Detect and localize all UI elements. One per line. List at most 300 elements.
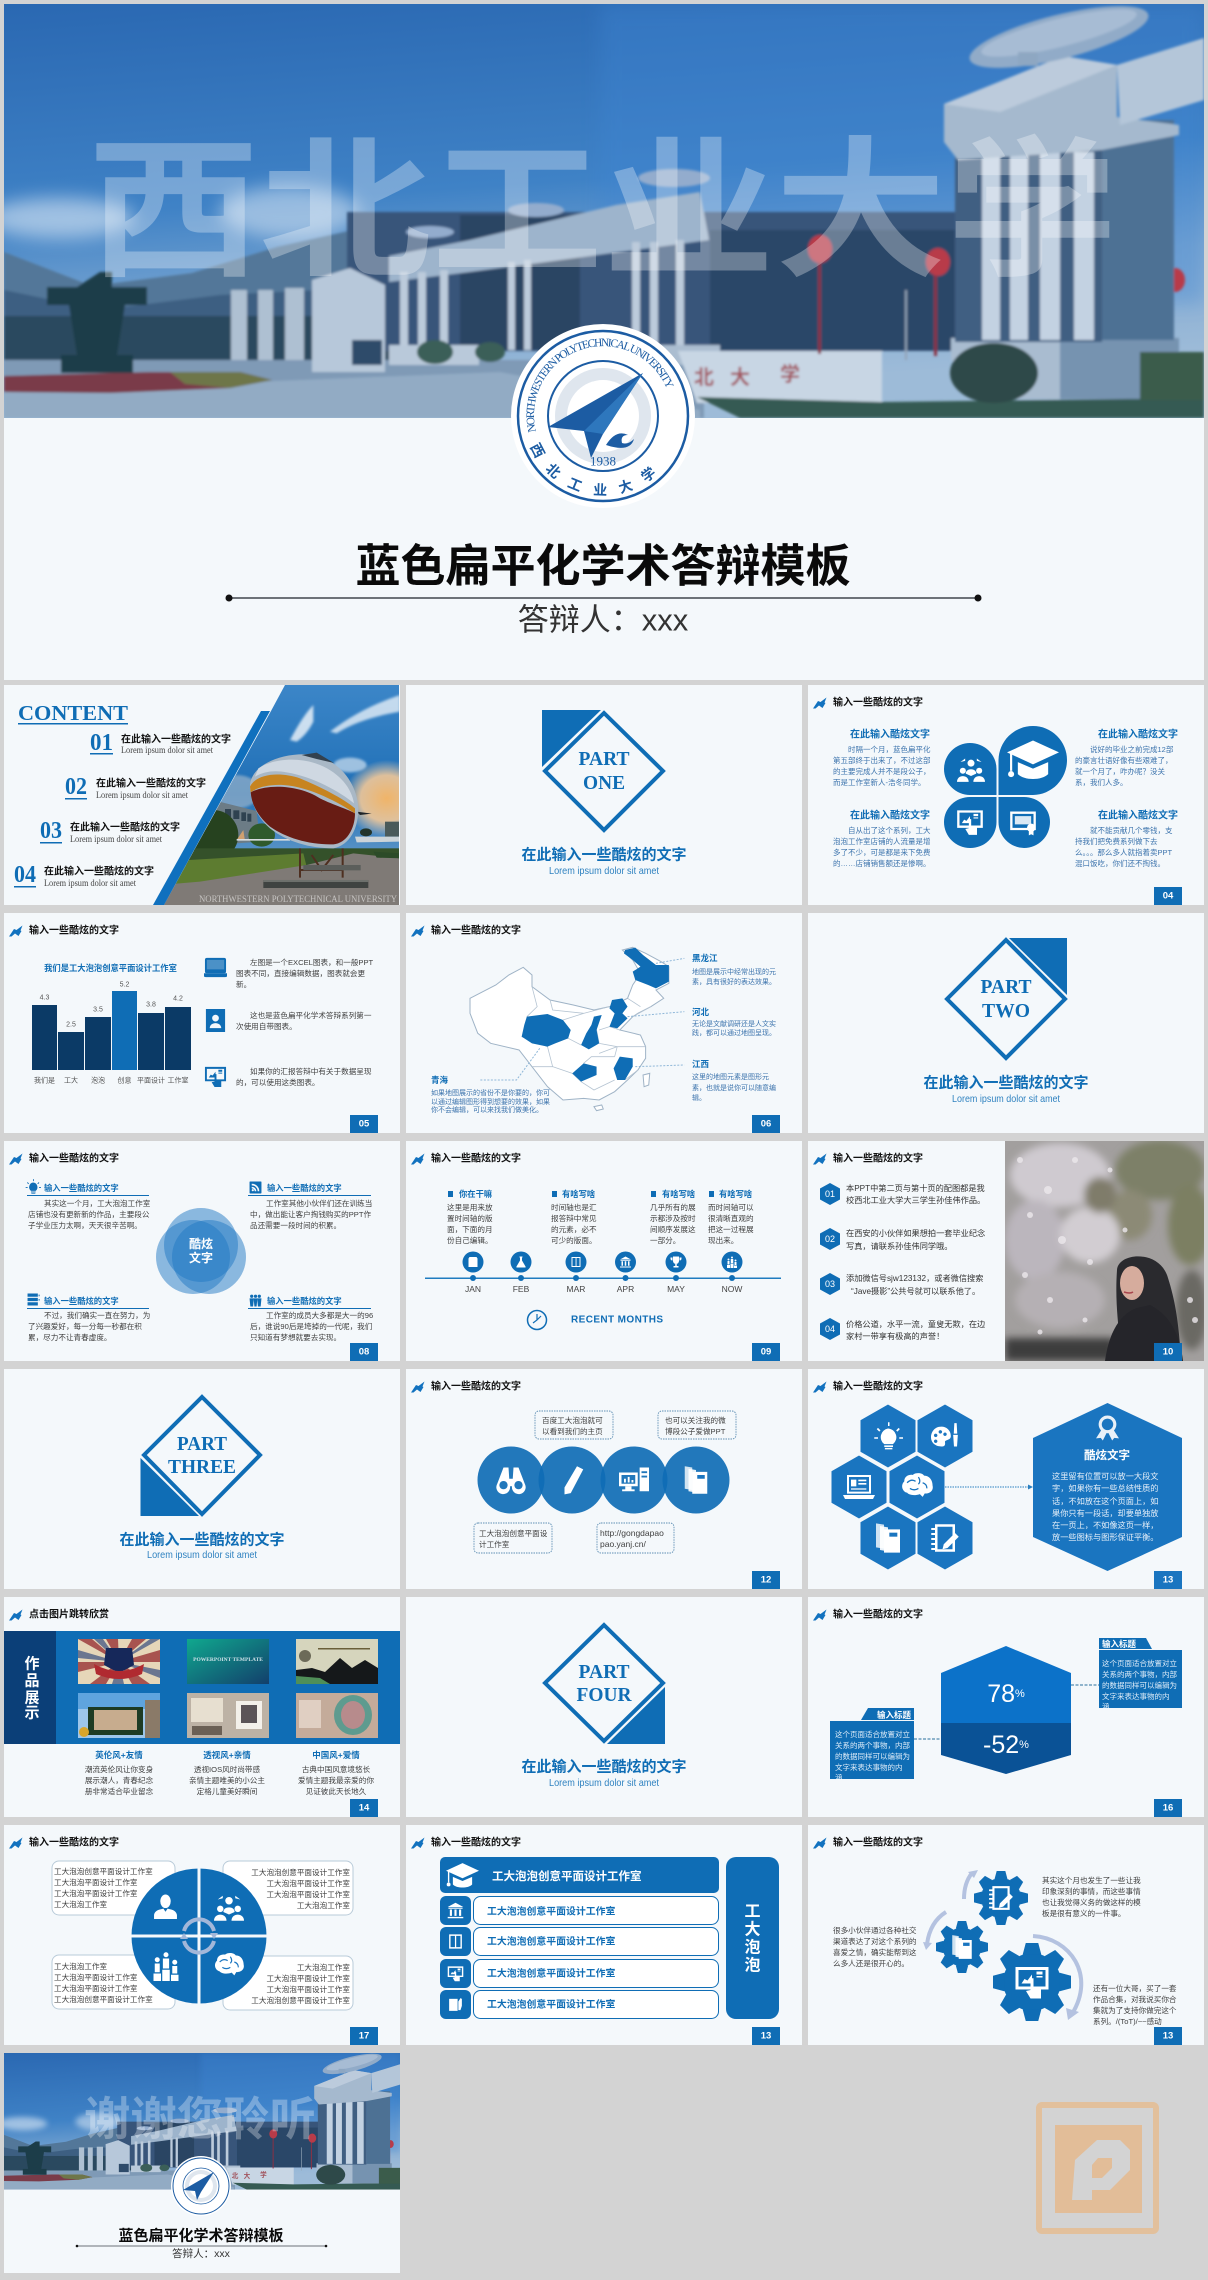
airplane photo: [164, 685, 399, 905]
header: 输入一些酷炫的文字: [431, 1380, 521, 1392]
hexagon: 78% and -52%: -52%: [983, 1731, 1029, 1759]
panel: bar chart slide: [4, 913, 400, 1133]
page number: 13: [761, 2030, 771, 2042]
item 04: [14, 862, 154, 888]
note 1: 新。: [236, 978, 251, 988]
text box: top right: [223, 1861, 353, 1915]
page number: [1154, 1571, 1182, 1589]
text block: bottom right: 持我们把免费系列做下去: [1075, 836, 1158, 846]
text block: top left: 时隔一个月，蓝色扁平化: [848, 744, 931, 754]
item 01: [90, 730, 231, 756]
label: Jiangxi: 江西: [692, 1059, 710, 1069]
text block: bottom left: 泡泡工作室店铺的人流量是增: [833, 836, 930, 846]
watermark: university name: 西北工业大学: [88, 127, 1118, 297]
quartered circle with icons: [129, 1866, 269, 2006]
thumbnail 6: vintage oval: [296, 1693, 378, 1738]
page number: [752, 1571, 780, 1589]
text block: bottom left: 在此输入酷炫文字: [850, 808, 930, 822]
campus photo: [0, 0, 1204, 418]
icon: laptop: [204, 958, 227, 977]
label: Qinghai: 如果地图展示的省份不是你要的，你可: [431, 1088, 550, 1096]
caption 2: 亲情主题唯美的小公主: [189, 1774, 265, 1784]
caption 3: [298, 1750, 374, 1796]
airplane photo: NORTHWESTERN POLYTECHNICAL UNIVERSITY: [199, 894, 397, 904]
row 2: 工大泡泡创意平面设计工作室: [487, 1934, 616, 1948]
text block: top left: [833, 728, 931, 786]
icon: contact card: [206, 1009, 225, 1032]
panel: overlapping circles slide: [4, 1141, 400, 1361]
page number: [1154, 1343, 1182, 1361]
item 03: 03: [40, 818, 62, 844]
text block: top right: 系，我们人多。: [1075, 776, 1128, 786]
callout: right: 文字来表达事物的内: [1102, 1690, 1170, 1700]
row 1: [440, 1896, 718, 1925]
column 4: [708, 1189, 754, 1244]
page number: [350, 1799, 378, 1817]
caption 1: [85, 1750, 154, 1796]
panel: part three: [4, 1369, 400, 1589]
section title: 在此输入一些酷炫的文字: [521, 1758, 687, 1776]
row 3: [440, 1959, 718, 1988]
header: [813, 1836, 923, 1848]
item: bottom left: 输入一些酷炫的文字: [44, 1296, 119, 1306]
item: bottom right: 后，谁说90后是垮掉的一代呢，我们: [250, 1320, 372, 1330]
caption 3: 古典中国风意境悠长: [302, 1764, 371, 1774]
item 02: [65, 774, 206, 800]
large hexagon summary: 话，不如放在这个页面上，如: [1052, 1496, 1158, 1506]
bar chart: 5.2: [120, 982, 129, 988]
callout: left: 涵: [835, 1772, 842, 1782]
thumbnail 4: photo board: [78, 1693, 160, 1738]
item 02: Lorem ipsum dolor sit amet: [96, 790, 188, 800]
label: Hebei: 河北: [692, 1007, 710, 1017]
text block: top left: 而是工作室新人-浩冬同学。: [833, 776, 926, 786]
caption 1: 展示潮人，青春纪念: [85, 1774, 154, 1784]
gear: books: [936, 1921, 988, 1973]
large hexagon summary: 这里留有位置可以放一大段文: [1052, 1470, 1158, 1480]
item: bottom right: 输入一些酷炫的文字: [267, 1296, 342, 1306]
item 04: 04: [825, 1324, 835, 1334]
chart title: 我们是工大泡泡创意平面设计工作室: [44, 963, 177, 973]
callout: left: 关系的两个事物，内部: [835, 1740, 910, 1750]
page number: [752, 1115, 780, 1133]
band label: 展: [24, 1690, 40, 1706]
page number: 12: [761, 1574, 771, 1586]
bar chart: 工大: [64, 1076, 78, 1084]
column 4: 有啥写啥: [719, 1189, 753, 1199]
column 4: 把这一过程展: [708, 1224, 754, 1234]
panel: part two: [808, 913, 1204, 1133]
note 2: 次使用自带图表。: [236, 1020, 297, 1030]
side label: 大: [744, 1920, 761, 1938]
text box: bottom right: [223, 1956, 353, 2010]
diamond badge: ONE: [583, 772, 625, 794]
text block: top right: 说好的毕业之前完成12部: [1090, 744, 1174, 754]
column 3: 几乎所有的展: [650, 1202, 696, 1212]
text box: top left: 工大泡泡工作室: [54, 1898, 108, 1908]
item 04: 价格公道，水平一流，童叟无欺，在边: [846, 1318, 985, 1328]
item 03: [40, 818, 180, 844]
title: 蓝色扁平化学术答辩模板: [355, 540, 851, 592]
timeline: NOW: [722, 1284, 742, 1294]
heading: CONTENT: CONTENT: [18, 701, 128, 725]
note 1: 左图是一个EXCEL图表，和一般PPT: [250, 956, 374, 966]
column 1: 这里是用来放: [447, 1202, 493, 1212]
item 02: [820, 1228, 985, 1250]
text: bottom right: 还有一位大哥，买了一套: [1093, 1982, 1177, 1992]
thumbnail 2: transparent style: [187, 1639, 269, 1684]
header: 输入一些酷炫的文字: [431, 924, 521, 936]
header: [411, 924, 521, 936]
diamond badge: PART: [578, 748, 630, 770]
section title: 在此输入一些酷炫的文字: [923, 1074, 1089, 1092]
note box 1: 百度工大泡泡就可: [542, 1414, 603, 1424]
text box: top left: 工大泡泡平面设计工作室: [54, 1876, 138, 1886]
header: [411, 1836, 521, 1848]
gear: data screen: [993, 1943, 1071, 2021]
page number: 16: [1163, 1802, 1173, 1814]
item 03: Lorem ipsum dolor sit amet: [70, 834, 162, 844]
caption 2: 透视风+亲情: [203, 1750, 251, 1760]
panel: quartered circle slide: [4, 1825, 400, 2045]
item 01: 01: [825, 1189, 835, 1199]
column 4: 而时间轴可以: [708, 1202, 754, 1212]
item 03: 添加微信号sjw123132，或者微信搜索: [846, 1272, 983, 1282]
text box: bottom left: 工大泡泡创意平面设计工作室: [54, 1994, 153, 2004]
text block: top right: [1075, 728, 1178, 786]
dotted arrow: [945, 1484, 1033, 1490]
timeline: MAY: [667, 1284, 685, 1294]
column 3: 间顺序发展这: [650, 1224, 696, 1234]
text: bottom right: 作品合集，对我说买你合: [1093, 1994, 1177, 2004]
text: left: 喜爱之情，确实能帮到这: [833, 1946, 917, 1956]
header: [9, 1152, 119, 1164]
page number: [752, 1343, 780, 1361]
blue band: [4, 1631, 400, 1744]
presenter: 答辩人：xxx: [518, 602, 689, 638]
caption 3: 爱情主题我最亲爱的你: [298, 1774, 374, 1784]
text block: bottom right: 混口饭吃，你们还不掏钱。: [1075, 858, 1165, 868]
header: [813, 1380, 923, 1392]
label: Qinghai: 以通过编辑图形得到想要的效果，如果: [431, 1096, 550, 1106]
note box 3: 工大泡泡创意平面设: [479, 1528, 548, 1538]
header: 输入一些酷炫的文字: [29, 1836, 119, 1848]
label: Heilongjiang: [692, 953, 776, 986]
bar chart: 4.2: [173, 996, 183, 1002]
title: 蓝色扁平化学术答辩模板: [118, 2226, 284, 2244]
side label: [726, 1857, 779, 2019]
label: Qinghai: 青海: [431, 1075, 449, 1085]
large hexagon summary: 在一页上，不如像这页一样，: [1052, 1520, 1158, 1530]
panel: percent hexagon slide: [808, 1597, 1204, 1817]
header: [813, 1608, 923, 1620]
header: 输入一些酷炫的文字: [833, 1152, 923, 1164]
item 04: Lorem ipsum dolor sit amet: [44, 878, 136, 888]
timeline: MAR: [567, 1284, 585, 1294]
page number: 05: [359, 1118, 370, 1130]
diamond badge: [144, 1397, 260, 1514]
item 01: [820, 1182, 985, 1205]
text box: top right: 工大泡泡平面设计工作室: [266, 1878, 350, 1888]
side label: 泡: [744, 1938, 761, 1956]
label: Qinghai: [431, 1075, 550, 1114]
row 4: [440, 1990, 718, 2019]
panel: list slide: [406, 1825, 802, 2045]
text: bottom right: 集就为了支持你做完这个: [1093, 2004, 1177, 2014]
text box: bottom right: 工大泡泡创意平面设计工作室: [251, 1994, 350, 2004]
column 2: 时间轴也是汇: [551, 1202, 597, 1212]
header: [813, 696, 923, 708]
diamond badge: FOUR: [576, 1684, 632, 1706]
header: 输入一些酷炫的文字: [431, 1836, 521, 1848]
text: top right: 其实这个月也发生了一些让我: [1042, 1874, 1141, 1884]
page number: [1154, 2027, 1182, 2045]
caption 2: 定格儿童美好瞬间: [197, 1786, 257, 1796]
panel: closing slide: [0, 2050, 400, 2273]
item 01: 本PPT中第二页与第十页的配图都是我: [846, 1182, 985, 1192]
triangle accent: [140, 1458, 199, 1516]
text box: bottom right: 工大泡泡平面设计工作室: [266, 1984, 350, 1994]
header: 输入一些酷炫的文字: [29, 924, 119, 936]
header: 输入一些酷炫的文字: [29, 1152, 119, 1164]
text box: bottom left: [52, 1955, 175, 2009]
item: bottom right: 工作室的成员大多都是大一的96: [266, 1310, 373, 1320]
bar chart: 3.8: [146, 1002, 156, 1008]
panel: China map slide: [406, 913, 802, 1133]
large hexagon summary: [1033, 1403, 1182, 1571]
hexagon icon cluster: [831, 1404, 973, 1570]
header: 输入一些酷炫的文字: [833, 1836, 923, 1848]
small seal logo: [171, 2156, 231, 2216]
item 03: 在此输入一些酷炫的文字: [70, 820, 180, 834]
icon: data screen: [205, 1067, 226, 1087]
item: top left: 店铺也没有更新新的作品，主要段公: [28, 1208, 150, 1218]
header: [9, 924, 119, 936]
bar chart: 我们是: [34, 1076, 55, 1084]
item: top left: 子学业压力太啊，天天很辛苦啊。: [28, 1220, 142, 1230]
header: 输入一些酷炫的文字: [833, 696, 923, 708]
item: top left: 输入一些酷炫的文字: [44, 1183, 119, 1193]
triangle accent: [607, 1687, 665, 1744]
item: top right: 品还需要一段时间的积累。: [250, 1220, 341, 1230]
diamond badge: PART: [980, 976, 1032, 998]
band label: 作: [24, 1656, 40, 1672]
item 04: [820, 1318, 985, 1340]
text box: top left: 工大泡泡创意平面设计工作室: [54, 1866, 153, 1876]
item 03: 03: [825, 1279, 835, 1289]
callout: right: 输入标题: [1102, 1639, 1137, 1649]
panel: portfolio slide: [4, 1597, 400, 1817]
large hexagon summary: 果你只有一段话，却要单独放: [1052, 1508, 1158, 1518]
band label: [4, 1631, 56, 1744]
column 4: 现出来。: [708, 1234, 738, 1244]
note box 2: 也可以关注我的微: [665, 1414, 726, 1424]
section subtitle: Lorem ipsum dolor sit amet: [549, 1777, 659, 1789]
item: bottom right: 只知道有梦想就要去实现。: [250, 1332, 341, 1342]
text: left: 么多人还是很开心的。: [833, 1958, 909, 1968]
item 04: 家村一带享有极高的声誉！: [846, 1330, 944, 1340]
centre venn circles: 酷炫: [189, 1236, 213, 1251]
page number: [350, 1343, 378, 1361]
callout: left: 的数据同样可以编辑为: [835, 1750, 910, 1760]
column 2: 报答辩中常见: [551, 1212, 597, 1222]
page number: [1154, 1799, 1182, 1817]
text: bottom right: 系列。/(ToT)/~~感动: [1093, 2016, 1162, 2026]
page number: [350, 2027, 378, 2045]
column 2: 的元素，必不: [551, 1224, 597, 1234]
diamond badge: THREE: [168, 1456, 236, 1478]
timeline: APR: [617, 1284, 634, 1294]
header: [813, 1152, 923, 1164]
university seal logo: NORTHWESTERN POLYTECHNICAL UNIVERSITY: [526, 338, 674, 433]
column 2: 可少的版面。: [551, 1234, 597, 1244]
row 2: [440, 1927, 718, 1956]
callout: left: 输入标题: [877, 1710, 911, 1720]
text block: bottom right: 么。。。那么多人就指着卖PPT: [1075, 846, 1173, 856]
item: top right: 输入一些酷炫的文字: [267, 1183, 342, 1193]
photo accent stripe: [153, 711, 270, 905]
circular arrows: [923, 1870, 1081, 2020]
watermark: thanks: 谢谢您聆听: [84, 2093, 316, 2145]
bar chart: 泡泡: [91, 1076, 105, 1084]
item: bottom left: 了兴趣爱好，每一分每一秒都在积: [28, 1320, 142, 1330]
band label: 品: [24, 1672, 40, 1690]
text: left: 很多小伙伴通过各种社交: [833, 1924, 917, 1934]
label: Hebei: [692, 1007, 776, 1036]
text block: top left: 在此输入酷炫文字: [850, 728, 930, 740]
item 01: 在此输入一些酷炫的文字: [121, 732, 231, 746]
label: Jiangxi: 这里的地图元素是图形元: [692, 1072, 769, 1080]
callout: right: 关系的两个事物，内部: [1102, 1668, 1177, 1678]
row 1: 工大泡泡创意平面设计工作室: [487, 1904, 616, 1918]
caption 2: 透视IOS风时尚带感: [194, 1764, 261, 1774]
note 2: 这也是蓝色扁平化学术答辩系列第一: [250, 1010, 372, 1020]
page number: 17: [359, 2030, 369, 2042]
section title: 在此输入一些酷炫的文字: [119, 1530, 285, 1548]
callout: right: 涵: [1102, 1702, 1110, 1710]
header: 输入一些酷炫的文字: [833, 1380, 923, 1392]
panel: cover slide: [4, 4, 1204, 680]
note box 3: [474, 1523, 552, 1553]
text box: bottom right: 工大泡泡工作室: [297, 1962, 350, 1972]
item 02: 02: [825, 1234, 835, 1244]
item: bottom left: 不过，我们确实一直在努力，为: [44, 1310, 150, 1320]
caption 3: 见证彼此天长地久: [306, 1786, 367, 1796]
page number: 09: [761, 1346, 771, 1358]
note box 4: [597, 1523, 674, 1553]
note box 1: 以看到我们的主页: [542, 1426, 603, 1436]
item: bottom right: [248, 1295, 373, 1342]
bar chart: 3.5: [93, 1006, 103, 1014]
text: top right: 也让我觉得义务的做这样的模: [1042, 1896, 1141, 1906]
callout: right: [1099, 1638, 1182, 1710]
page number: 13: [1163, 1574, 1173, 1586]
panel: gears slide: [808, 1825, 1204, 2045]
text box: top right: 工大泡泡工作室: [297, 1900, 350, 1910]
large hexagon summary: 字，如果你有一些总结性质的: [1052, 1482, 1158, 1492]
thumbnail 2: transparent style: POWERPOINT TEMPLATE: [193, 1657, 263, 1663]
text box: bottom left: 工大泡泡平面设计工作室: [54, 1972, 138, 1982]
column 3: 一部分。: [650, 1234, 680, 1244]
column 2: [551, 1189, 597, 1244]
circles with icons: [478, 1446, 730, 1514]
timeline: FEB: [513, 1284, 530, 1294]
item: top left: 其实这一个月，工大泡泡工作室: [44, 1198, 151, 1208]
caption 2: [189, 1750, 265, 1796]
dashed connectors: [914, 1685, 1099, 1739]
panel: hexagon slide: [808, 1369, 1204, 1589]
row 3: 工大泡泡创意平面设计工作室: [487, 1966, 616, 1980]
top banner: 工大泡泡创意平面设计工作室: [492, 1869, 642, 1883]
item: top right: 中，做出能让客户掏钱购买的PPT作: [250, 1208, 371, 1218]
caption 1: 册非常适合毕业留念: [85, 1786, 154, 1796]
label: Heilongjiang: 黑龙江: [692, 953, 718, 963]
column 1: 你在干嘛: [459, 1189, 493, 1199]
presenter: 答辩人：xxx: [172, 2247, 231, 2260]
university seal logo: 西 北 工 业 大 学: [530, 442, 655, 496]
column 1: 面，下面的月: [447, 1224, 493, 1234]
section subtitle: Lorem ipsum dolor sit amet: [549, 865, 659, 877]
panel: four circles slide: [406, 1369, 802, 1589]
callout: right: 的数据同样可以编辑为: [1102, 1680, 1177, 1690]
diamond badge: PART: [177, 1433, 228, 1455]
item 03: [820, 1272, 983, 1296]
text block: bottom right: 就不能贡献几个零钱，支: [1090, 824, 1173, 834]
page number: [1154, 887, 1182, 905]
text: top right: 印象深刻的事情，而这些事情: [1042, 1886, 1141, 1896]
item 02: 写真，请联系孙佳伟同学哦。: [846, 1240, 952, 1250]
note 1: 图表不同，直接编辑数据，图表就会更: [236, 968, 365, 978]
column 1: 份自己编辑。: [447, 1234, 493, 1244]
column 3: 示都涉及按时: [650, 1212, 696, 1222]
note box 2: 博段公子爱做PPT: [665, 1426, 726, 1436]
page number: 04: [1163, 890, 1174, 902]
portrait photo: [1005, 1140, 1208, 1361]
text box: top right: 工大泡泡创意平面设计工作室: [251, 1866, 350, 1876]
text: left: 渠道表达了对这个系列的: [833, 1936, 917, 1946]
page number: 08: [359, 1346, 369, 1358]
column 2: 有啥写啥: [562, 1189, 596, 1199]
callout: right: 这个页面适合放置对立: [1102, 1658, 1177, 1668]
text box: bottom left: 工大泡泡工作室: [54, 1960, 108, 1970]
section title: 在此输入一些酷炫的文字: [521, 846, 687, 864]
diamond badge: PART: [578, 1661, 630, 1683]
section subtitle: Lorem ipsum dolor sit amet: [952, 1093, 1060, 1105]
text: top right: 板是很有意义的一件事。: [1042, 1908, 1126, 1918]
label: Heilongjiang: 地图是展示中经常出现的元: [692, 966, 776, 976]
header: [9, 1608, 109, 1620]
header: [411, 1152, 521, 1164]
panel: part four: [406, 1597, 802, 1817]
band label: 示: [24, 1704, 40, 1722]
item 01: Lorem ipsum dolor sit amet: [121, 745, 213, 755]
bar chart: 平面设计: [137, 1076, 165, 1084]
label: Hebei: 践，都可以通过地图呈现。: [692, 1028, 776, 1036]
label: Jiangxi: 辑。: [692, 1092, 706, 1102]
page number: 14: [359, 1802, 370, 1814]
text block: bottom left: 的……店铺销售额还是惨啊。: [833, 858, 930, 868]
text block: bottom right: 在此输入酷炫文字: [1098, 808, 1178, 822]
text block: top left: 第五部终于出来了，不过这部: [833, 754, 931, 764]
note box 3: 计工作室: [479, 1538, 510, 1548]
column 1: 置时间轴的版: [447, 1212, 493, 1222]
text block: bottom right: [1075, 808, 1178, 868]
text block: bottom left: 多了不少，可是都是来下免费: [833, 846, 931, 856]
text block: bottom left: [833, 808, 931, 868]
text box: top left: 工大泡泡平面设计工作室: [54, 1888, 138, 1898]
note box 4: http://gongdapao: [600, 1528, 664, 1538]
header: 输入一些酷炫的文字: [833, 1608, 923, 1620]
